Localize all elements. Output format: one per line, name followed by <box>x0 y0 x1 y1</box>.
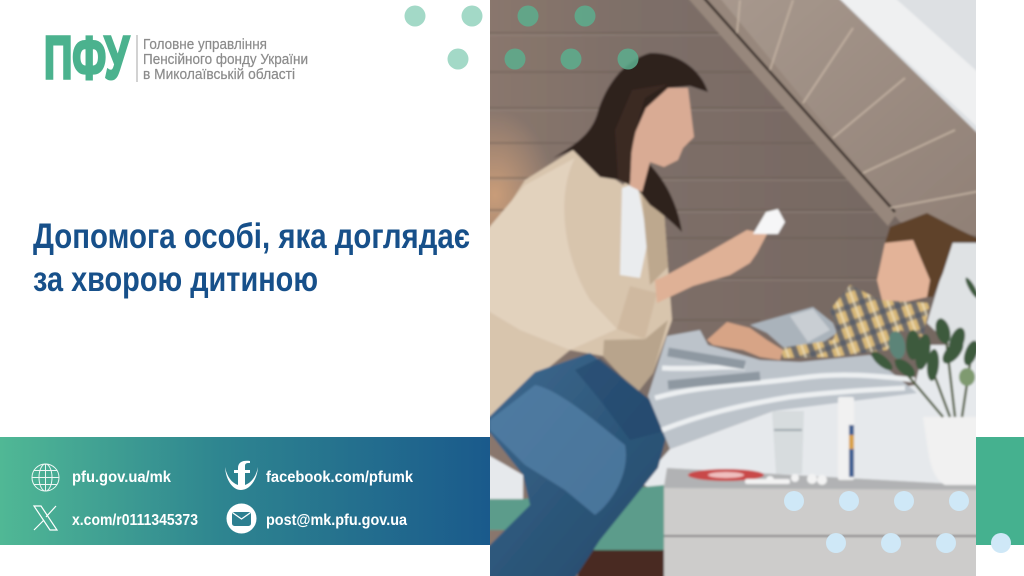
title <box>33 216 470 299</box>
title: Допомога особі, яка доглядає <box>33 216 470 256</box>
title: за хворою дитиною <box>33 259 318 299</box>
child: hand <box>707 322 783 360</box>
logo <box>44 24 308 92</box>
logo caption <box>143 37 308 83</box>
green bed frame <box>470 485 664 550</box>
woman: neck and face <box>630 88 694 192</box>
tablet tube <box>838 397 854 480</box>
decorative dots: top green on white <box>404 6 482 70</box>
pills <box>745 474 827 485</box>
glass of water <box>772 411 804 474</box>
woman: jacket shadow <box>603 320 668 393</box>
right green block <box>976 437 1024 545</box>
logo caption: Головне управління <box>143 37 267 53</box>
woman: jacket sleeve cuff <box>617 286 657 339</box>
child: sleeve <box>750 307 837 353</box>
facebook link: facebook.com/pfumk <box>266 469 413 486</box>
mattress <box>470 345 1000 499</box>
sloped ceiling <box>689 0 976 236</box>
woman: jacket <box>490 148 674 418</box>
icon: facebook <box>225 461 258 490</box>
website link: pfu.gov.ua/mk <box>72 469 171 486</box>
woman: hair front strand <box>616 86 663 186</box>
X link: x.com/r0111345373 <box>72 512 198 529</box>
child: pillow <box>926 241 976 346</box>
woman: jacket collar <box>642 195 669 284</box>
logo divider <box>136 35 138 82</box>
woman: hair <box>553 53 708 232</box>
icon: mail <box>226 504 256 534</box>
child: face <box>877 240 930 303</box>
logo mark ПФУ: ПФУ <box>44 24 129 92</box>
email link: post@mk.pfu.gov.ua <box>266 512 407 529</box>
flower pot <box>924 418 976 486</box>
contact band <box>0 437 490 545</box>
plant <box>869 276 981 417</box>
child: hair <box>885 213 985 297</box>
logo caption: Пенсійного фонду України <box>143 52 308 68</box>
blanket <box>648 330 917 449</box>
logo caption: в Миколаївській області <box>143 67 295 83</box>
woman: arm and hand <box>655 230 767 303</box>
thermometer <box>753 209 785 234</box>
icon: X <box>34 506 57 530</box>
decorative dots: top green on photo <box>504 6 638 70</box>
wooden wall <box>490 0 976 576</box>
woman: jeans <box>490 352 666 576</box>
floor shadow <box>578 550 668 576</box>
icon: globe <box>32 464 59 491</box>
child: plaid shirt <box>780 285 930 358</box>
photo: mother caring for sick child <box>490 0 976 576</box>
woman: shirt <box>620 183 648 278</box>
decorative dots: bottom blue <box>784 491 1011 553</box>
bedside table <box>664 468 990 576</box>
